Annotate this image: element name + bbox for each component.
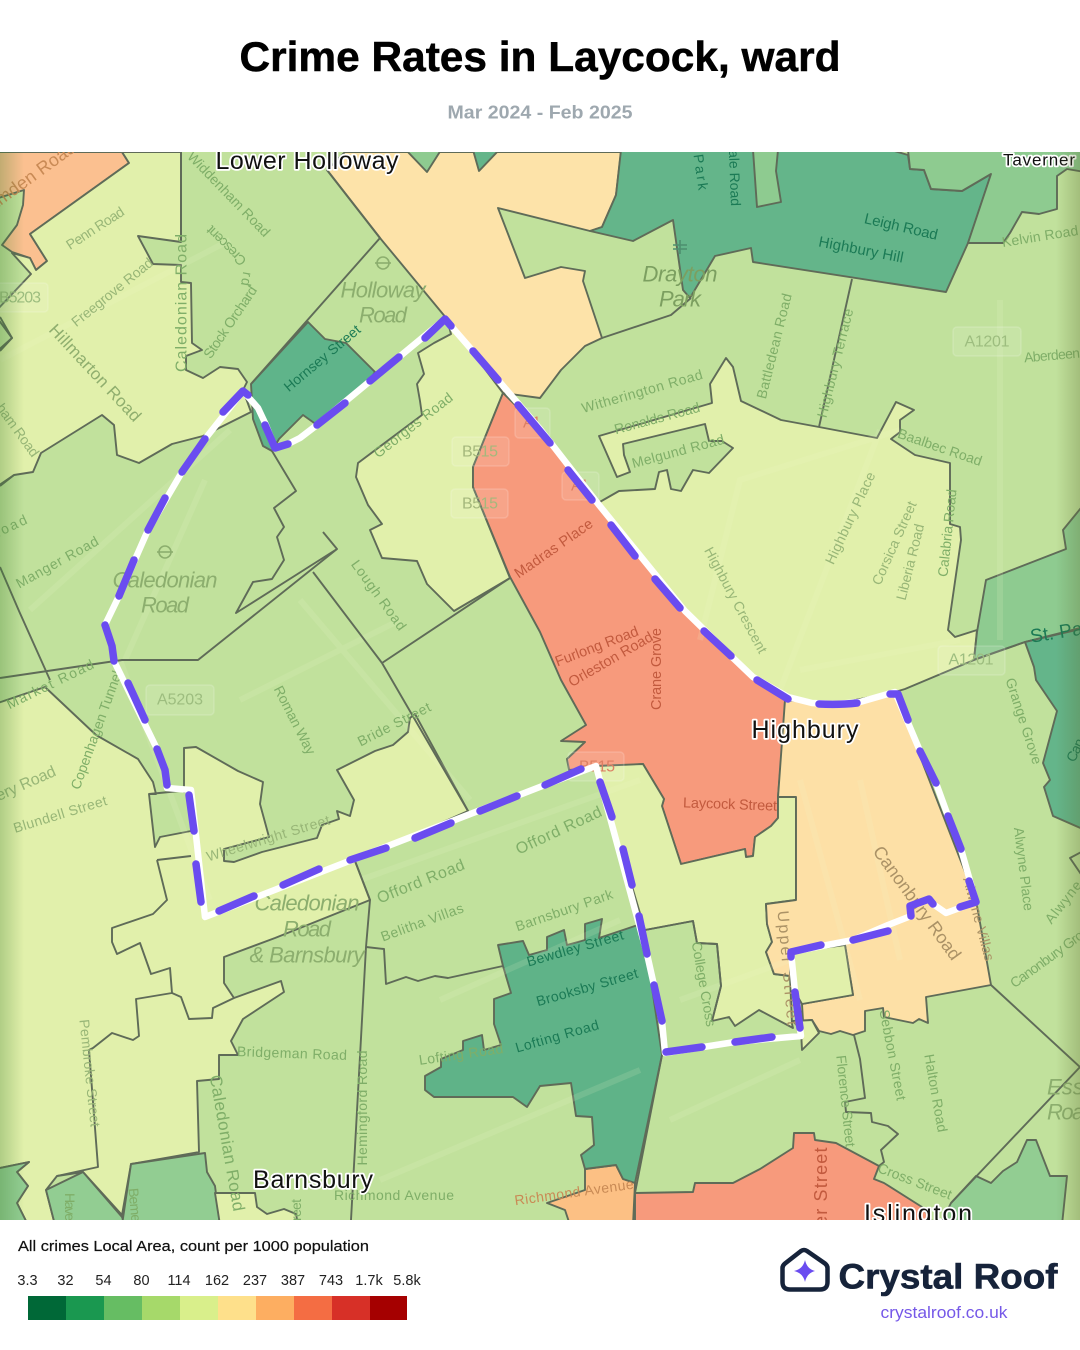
road labels: Caledonian [112, 568, 218, 592]
road labels: Florence Street [833, 1054, 859, 1148]
area: Highbury Fields pale [598, 358, 977, 704]
road labels: & Barnsbury [250, 942, 366, 968]
road labels: Crescent [203, 223, 249, 269]
legend title: All crimes Local Area, count per 1000 population [18, 1239, 369, 1255]
area: College Cross pale [596, 764, 796, 1028]
logo: Crystal Roof [782, 1250, 1058, 1322]
subtitle: date range: Mar 2024 - Feb 2025 [448, 102, 632, 122]
road shield labels: A1 [523, 414, 541, 432]
road labels: Park [691, 153, 712, 192]
road labels: Richmond Avenue [334, 1187, 454, 1203]
legend colour bar [28, 1296, 407, 1320]
place names [216, 147, 1075, 1228]
legend scale labels: 54 [95, 1273, 112, 1289]
road labels: ale Road [726, 150, 744, 206]
road labels: Bewdley Street [525, 926, 625, 969]
area: top lighter notch [753, 150, 781, 207]
road labels: Market Road [4, 656, 96, 712]
website url: crystalroof.co.uk [880, 1304, 1008, 1322]
area: bottom right medium green [940, 1140, 1067, 1225]
road labels: Drayton [642, 262, 718, 286]
road labels: Hillmarton Road [45, 320, 145, 426]
road labels: Hemingford Road [354, 1050, 370, 1166]
legend scale labels: 80 [133, 1273, 150, 1289]
road labels: Hornsey Street [280, 321, 364, 395]
road labels: Melgund Road [630, 431, 726, 471]
road labels: Stock Orchard [200, 283, 260, 361]
place names: Highbury [752, 716, 859, 744]
road shield labels: A1 [571, 478, 589, 494]
road labels: Kelvin Road [1001, 222, 1079, 250]
road labels: Ronalds Road [612, 399, 702, 437]
area: west pale Hillmarton [0, 152, 251, 488]
road labels: Grange Grove [1002, 676, 1046, 766]
road labels: Penn Road [63, 203, 127, 253]
area: St Paul's medium green [974, 503, 1080, 660]
road shield labels: B515 [462, 444, 498, 460]
road labels: Wheelwright Street [204, 812, 332, 864]
road labels: Highbury Crescent [701, 544, 771, 656]
ward boundary: purple dashes [105, 319, 976, 1052]
minor road network [174, 264, 1003, 1102]
place names: Barnsbury [253, 1166, 374, 1194]
legend scale labels: 387 [281, 1273, 305, 1289]
legend scale labels: 237 [243, 1273, 267, 1289]
area: Camden Road orange [0, 152, 129, 270]
road labels: Freegrove Road [68, 254, 156, 330]
area: bottom left medium green [0, 1153, 298, 1225]
road labels: Lofting Road [418, 1040, 504, 1068]
road labels: Caledonian [254, 890, 360, 916]
road labels: Have [62, 1193, 78, 1221]
area: St Paul's dark green [1025, 628, 1080, 830]
road labels: Aberdeen [1023, 345, 1080, 365]
road labels: Offord Road [375, 857, 467, 907]
road shield labels: B515 [462, 496, 498, 512]
road labels: Madras Place [512, 516, 596, 582]
legend scale labels [17, 1273, 421, 1289]
legend scale labels: 1.7k [355, 1273, 383, 1289]
road labels: Canonbury Road [869, 842, 965, 964]
road labels: Corsica Street [868, 499, 920, 587]
legend scale labels: 5.8k [393, 1273, 421, 1289]
place names: Lower Holloway [216, 147, 399, 175]
title: Crime Rates in Laycock, ward [240, 33, 840, 80]
road labels: Bride Street [355, 699, 433, 749]
road labels: Offord Road [513, 804, 605, 858]
legend scale labels: 114 [167, 1273, 191, 1289]
road labels: Battledean Road [753, 292, 795, 400]
road labels: Roman Way [271, 683, 319, 757]
road labels: Georges Road [370, 389, 456, 461]
road shield labels: B5203 [0, 290, 41, 306]
road labels: Holloway [340, 278, 428, 302]
road labels: Belitha Villas [378, 900, 466, 944]
road labels: Baalbec Road [896, 425, 984, 469]
road labels: Bridgeman Road [237, 1043, 347, 1063]
area: Highbury Hill dark green [590, 150, 991, 298]
road labels: Lough Road [348, 557, 410, 633]
road labels: Road [283, 916, 332, 942]
road labels: Furlong Road [553, 624, 641, 670]
road labels: Barnsbury Park [513, 886, 616, 934]
road labels: Manger Road [13, 533, 101, 591]
icons: tube stations [157, 240, 687, 558]
area: Kelvin Road medium green [908, 150, 1080, 243]
road labels: Caledonian Road [174, 234, 190, 372]
road labels: Widdenham Road [184, 148, 274, 240]
road labels: Crane Grove [649, 628, 665, 710]
area: Richmond Avenue orange [547, 1165, 635, 1225]
road shield labels: A1201 [964, 334, 1010, 350]
road labels: Alwyne Villas [960, 875, 998, 963]
road labels: Upper Street [811, 1148, 831, 1262]
area: Upper Street south red [635, 1133, 935, 1225]
road labels: reet [288, 1199, 304, 1221]
area: south west pale [0, 687, 468, 1225]
boundary lines between areas [0, 152, 1080, 1220]
logo wordmark: Crystal Roof [838, 1258, 1058, 1296]
road labels: Blundell Street [11, 792, 109, 836]
legend [17, 1239, 421, 1320]
road labels: Brooksby Street [534, 965, 640, 1009]
area: small pale south of cream [793, 1020, 819, 1050]
road shield labels: A5203 [157, 692, 203, 708]
place names: Islington [864, 1200, 972, 1228]
place names: Taverner [1003, 150, 1075, 170]
map edge vignette [0, 152, 1080, 1220]
road labels: Caledonian Road [206, 1073, 248, 1213]
legend scale labels: 32 [57, 1273, 74, 1289]
road labels: Upper Street [774, 910, 801, 1027]
road labels: Highbury Place [822, 469, 878, 567]
road labels: Highbury Terrace [814, 307, 856, 419]
area: Brooksby dark green [425, 919, 662, 1183]
road labels: Beme [126, 1187, 144, 1223]
area: central pale Georges Road [356, 319, 510, 611]
road labels: Orleston Road [566, 629, 656, 691]
area: small top green patches [406, 150, 499, 172]
road labels: rd [238, 271, 256, 287]
road labels: Halton Road [921, 1053, 951, 1133]
road labels: College Cross [689, 940, 719, 1028]
road labels: Calabria Road [934, 488, 960, 578]
area: Hornsey Street dark green [251, 322, 375, 451]
road labels: Park [659, 286, 702, 312]
area: Canonbury cream [766, 692, 991, 1035]
road labels: Laycock Street [683, 795, 777, 815]
road labels: Richmond Avenue [513, 1176, 635, 1208]
road labels: Highbury Hill [817, 233, 905, 267]
area: Madras Place red [473, 393, 785, 864]
road labels: Cross Street [876, 1160, 954, 1202]
road labels: Alwyne Place [1011, 826, 1037, 912]
road labels: Witherington Road [580, 366, 704, 416]
road shield labels [0, 290, 1010, 776]
road shield labels: B515 [579, 758, 615, 776]
area: north cream [327, 152, 621, 398]
road labels: Pembroke Street [76, 1018, 104, 1128]
road shield labels: A1201 [948, 652, 994, 668]
legend scale labels: 743 [319, 1273, 343, 1289]
icon: house with star [782, 1250, 828, 1290]
area: pale block inside Upper Street [791, 945, 853, 1004]
road labels: Road [141, 592, 190, 618]
ward boundary: white line [105, 319, 976, 1053]
road shields [0, 283, 1021, 781]
road labels: Road [359, 302, 408, 328]
road labels: Leigh Road [863, 210, 939, 244]
legend scale labels: 162 [205, 1273, 229, 1289]
road labels: Sebbon Street [876, 1008, 910, 1102]
road labels: Lofting Road [513, 1016, 601, 1056]
road labels: Copenhagen Tunnel [67, 669, 125, 791]
road labels: Liberia Road [893, 522, 927, 602]
legend scale labels: 3.3 [17, 1273, 38, 1289]
